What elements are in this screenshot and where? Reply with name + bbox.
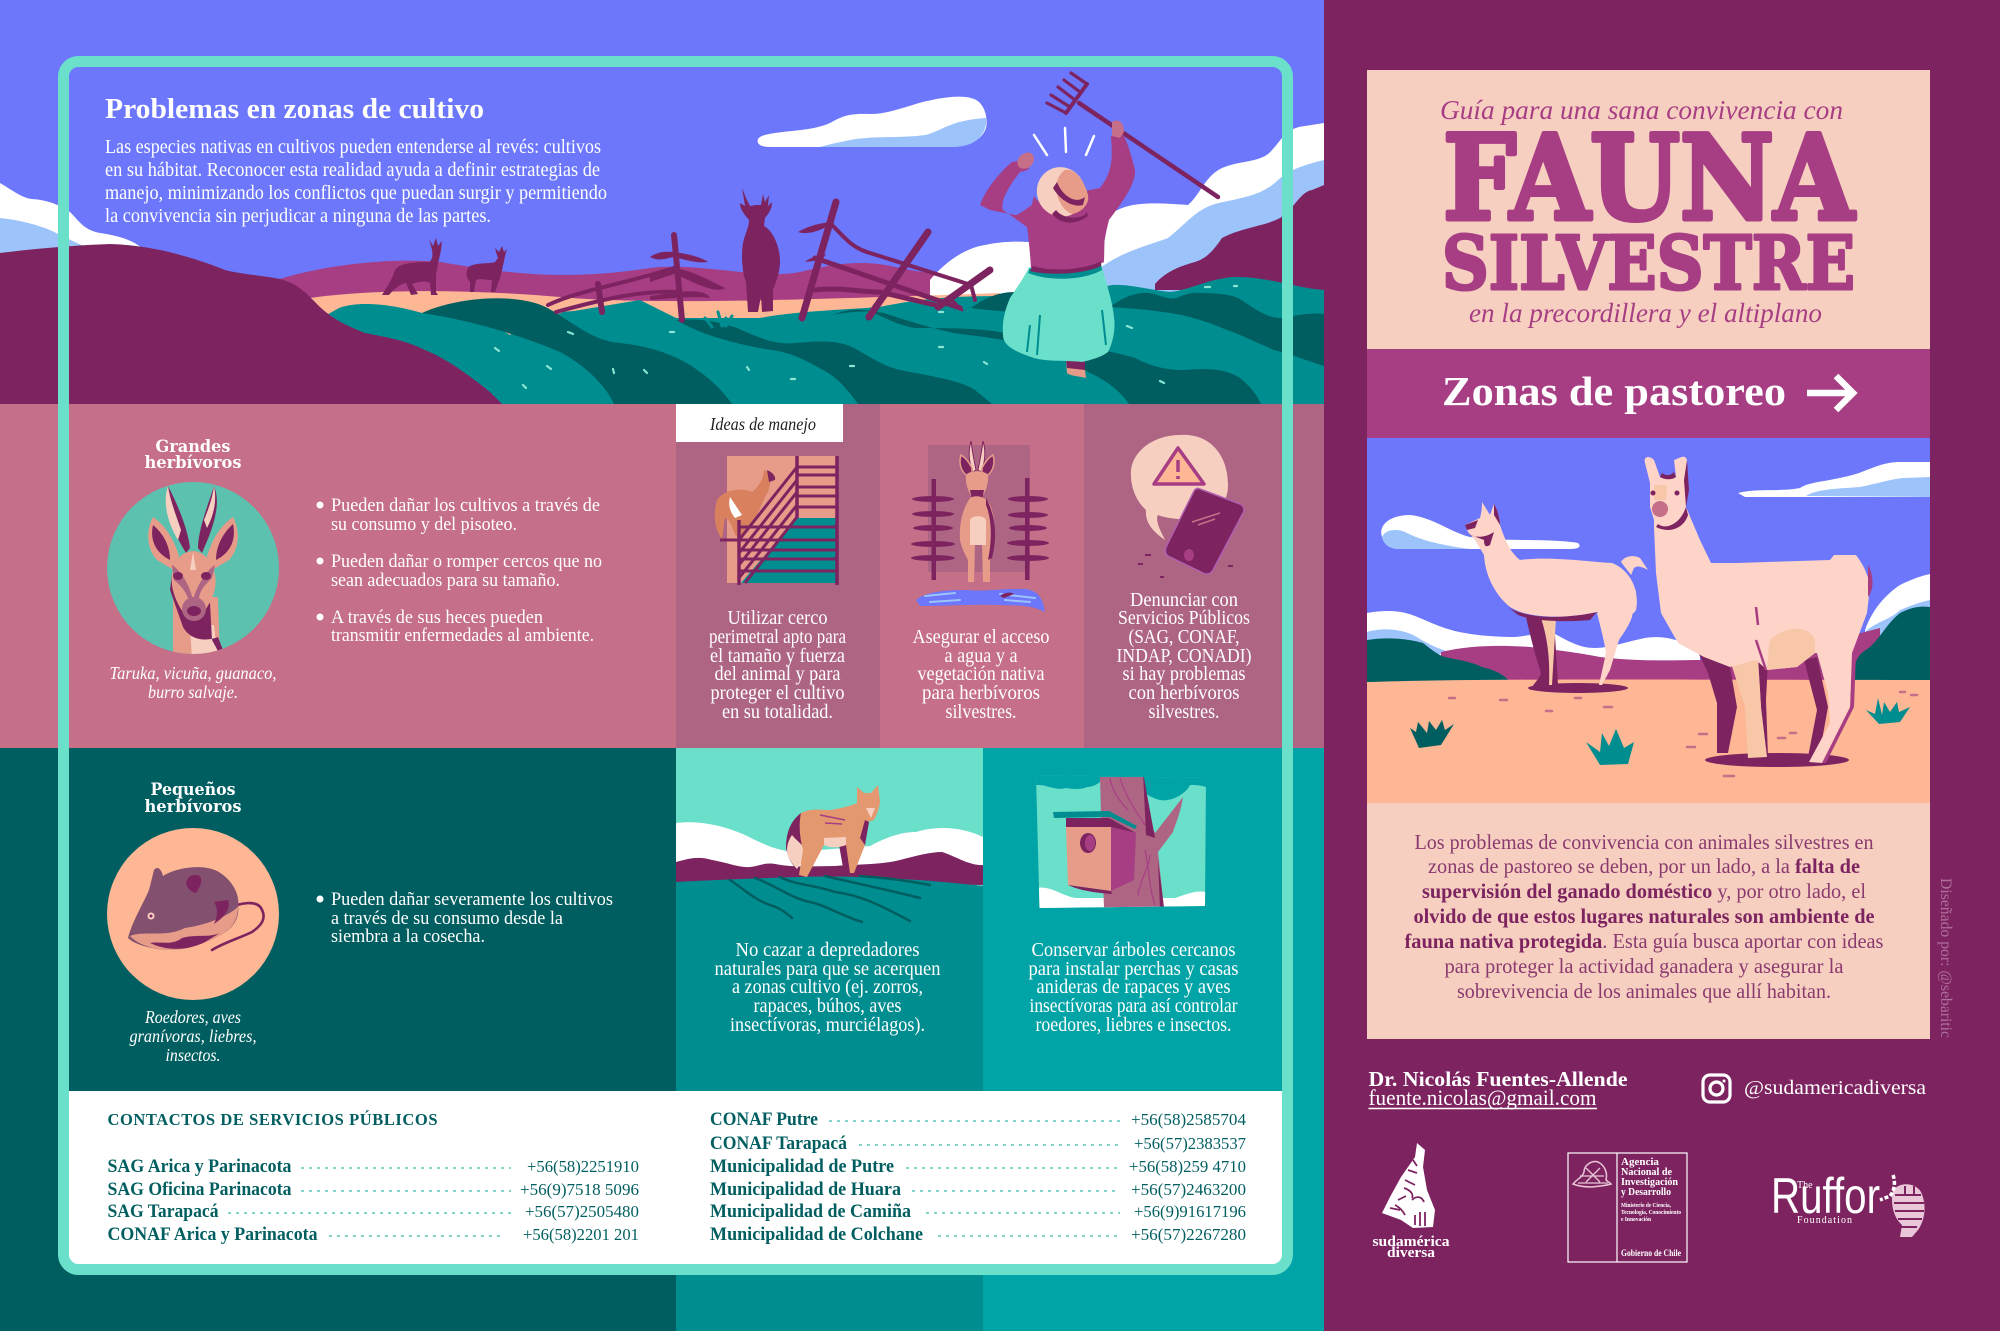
text block: intro: en su hábitat. Reconocer esta realidad ayuda a definir estrategias de [105, 159, 600, 181]
text: idea nest boxes [1028, 939, 1239, 1036]
caption: species: granívoras, liebres, [130, 1026, 256, 1046]
plants [1410, 698, 1910, 765]
heading: grandes herbívoros: herbívoros [144, 453, 242, 473]
logo: The Rufford Foundation: Foundation [1797, 1215, 1852, 1226]
row: large herbivores background [0, 404, 1324, 748]
list: contacts left: +56(9)7518 5096 [520, 1180, 639, 1199]
sand strip [310, 291, 1000, 335]
list: contacts right: CONAF Tarapacá [710, 1134, 847, 1154]
text: idea predators: No cazar a depredadores [736, 939, 920, 961]
text block: intro [105, 136, 607, 227]
deer silhouette: large [740, 188, 780, 312]
title: fauna: FAUNA [1443, 109, 1856, 247]
icon: fox landscape [676, 748, 983, 924]
text: idea report: Servicios Públicos [1118, 607, 1250, 629]
small plant [705, 312, 732, 327]
bullet list: problems large herbivores: Pueden dañar los cultivos a través de [331, 495, 600, 516]
handle: instagram: @sudamericadiversa [1744, 1077, 1926, 1099]
text: idea report: INDAP, CONADI) [1116, 645, 1252, 667]
panel: description: supervisión del ganado doméstico y, por otro lado, el [1422, 879, 1866, 903]
contact: author [1368, 1067, 1628, 1110]
text: idea report: Denunciar con [1130, 589, 1238, 611]
list: contacts right: CONAF Putre [710, 1110, 818, 1130]
text: idea fence: proteger el cultivo [710, 682, 844, 704]
label: ideas de manejo: Ideas de manejo [709, 414, 816, 434]
logo: ANID: e Innovación [1621, 1217, 1652, 1223]
list: contacts left: SAG Arica y Parinacota [108, 1157, 292, 1177]
list: contacts right: Municipalidad de Colchane [710, 1225, 923, 1245]
panel: description: para proteger la actividad ganadera y asegurar la [1444, 954, 1844, 978]
text: idea nest boxes: Conservar árboles cercanos [1032, 939, 1236, 961]
title: silvestre: SILVESTRE [1442, 221, 1855, 307]
panel: description: fauna nativa protegida. Esta guía busca aportar con ideas [1404, 929, 1884, 953]
blouse and arms [980, 130, 1135, 270]
arrow [1807, 376, 1853, 410]
bullet list: problems large herbivores: su consumo y del pisoteo. [331, 514, 517, 535]
icon: taruka with water and native plants [911, 441, 1049, 612]
list: contacts right: +56(57)2463200 [1131, 1180, 1246, 1199]
panel: idea fence [709, 456, 846, 723]
hill: left purple [0, 244, 502, 404]
list: contacts right: Municipalidad de Putre [710, 1157, 894, 1177]
heading: pequeños herbívoros: herbívoros [144, 797, 242, 817]
text: idea nest boxes: insectívoras para así controlar [1030, 995, 1238, 1017]
text: idea water: para herbívoros [922, 682, 1040, 704]
deer silhouette: left [382, 238, 442, 295]
logo: ANID [1568, 1153, 1687, 1262]
caption: species: Taruka, vicuña, guanaco, [110, 663, 276, 683]
icon: instagram [1703, 1075, 1730, 1102]
text: idea nest boxes: roedores, liebres e insectos. [1036, 1014, 1232, 1036]
panel: large herbivores [107, 437, 602, 702]
list: contacts right [710, 1110, 1246, 1245]
list: contacts left: +56(57)2505480 [525, 1202, 639, 1221]
text: idea fence: el tamaño y fuerza [710, 645, 845, 667]
credit: designer: Diseñado por: @sebaritic [1937, 878, 1954, 1038]
ground specks [1449, 692, 1917, 776]
logo: ANID: Ministerio de Ciencia, [1621, 1203, 1671, 1209]
heading: pequeños herbívoros [144, 780, 242, 817]
panel: small herbivores [107, 780, 613, 1065]
text: idea report [1116, 589, 1252, 723]
logo: The Rufford Foundation: The [1797, 1180, 1813, 1191]
fox [786, 785, 880, 877]
text: idea predators [714, 939, 940, 1036]
cloud: big right [930, 123, 1324, 310]
cloud: top centre [758, 97, 987, 147]
bullet list: problems large herbivores [316, 495, 602, 646]
cloud: left [0, 183, 140, 253]
text: idea predators: insectívoras, murciélagos). [730, 1014, 925, 1036]
list: contacts left [108, 1157, 639, 1245]
heading: grandes herbívoros [144, 437, 242, 473]
list: contacts left: +56(58)2251910 [527, 1157, 639, 1176]
label: ideas de manejo [676, 404, 843, 442]
subtitle bottom: en la precordillera y el altiplano [1469, 298, 1822, 328]
mountains: right purple [1155, 185, 1324, 290]
banner: zonas de pastoreo [1367, 349, 1930, 438]
panel: title block [1367, 70, 1930, 349]
text: idea nest boxes: anideras de rapaces y aves [1036, 976, 1231, 998]
icon: animal behind fence [715, 456, 837, 585]
logo: sudamérica diversa: diversa [1387, 1245, 1436, 1261]
mountains: far purple hills [280, 260, 934, 302]
text: idea fence: perimetral apto para [709, 626, 846, 648]
contact: author: Dr. Nicolás Fuentes-Allende [1368, 1067, 1628, 1091]
hands [1017, 120, 1124, 169]
fence leaves [650, 222, 835, 300]
text: idea report: silvestres. [1148, 701, 1220, 723]
text: idea water: silvestres. [946, 701, 1016, 723]
panel: top scene, crop problems [0, 0, 1324, 404]
llama: large [1645, 457, 1872, 767]
caption: species: Roedores, aves [144, 1007, 241, 1027]
text: idea predators: naturales para que se acerquen [714, 958, 940, 980]
logo: ANID: y Desarrollo [1621, 1186, 1671, 1198]
list: contacts right: +56(58)2585704 [1131, 1110, 1246, 1129]
text: idea report: (SAG, CONAF, [1128, 626, 1240, 648]
bullet list: problems large herbivores: A través de sus heces pueden [331, 607, 543, 628]
clouds [1367, 462, 1930, 670]
panel: idea report [1116, 435, 1252, 723]
text: idea fence [709, 607, 846, 723]
logo: The Rufford Foundation: Ruffor [1771, 1168, 1880, 1224]
panel: description: sobrevivencia de los animales que allí habitan. [1457, 979, 1831, 1003]
list: contacts right: +56(57)2267280 [1131, 1225, 1246, 1244]
bullet list: problems large herbivores: transmitir enfermedades al ambiente. [331, 625, 594, 646]
text: idea fence: Utilizar cerco [728, 607, 828, 629]
fields: green rows [300, 277, 1324, 404]
bullet list: problems small herbivores: siembra a la cosecha. [331, 926, 485, 947]
panel: idea water [911, 441, 1050, 723]
text: idea predators: rapaces, búhos, aves [754, 995, 902, 1017]
icon: taruka portrait [107, 482, 279, 660]
skirt [1003, 263, 1115, 362]
heading: contacts: CONTACTOS DE SERVICIOS PÚBLICOS [108, 1110, 438, 1129]
panel: description [1367, 803, 1930, 1039]
caption: species: burro salvaje. [148, 682, 238, 702]
heading: grandes herbívoros: Grandes [156, 437, 230, 457]
heading: pequeños herbívoros: Pequeños [150, 780, 236, 800]
list: contacts left: SAG Oficina Parinacota [108, 1180, 292, 1200]
frame: mint rounded border [64, 62, 1288, 1270]
heading: problems: Problemas en zonas de cultivo [105, 93, 484, 125]
logo: ANID: Tecnología, Conocimiento [1621, 1210, 1681, 1216]
list: contacts left: CONAF Arica y Parinacota [108, 1225, 318, 1245]
deer silhouette: middle [467, 246, 507, 292]
text: idea water: Asegurar el acceso [912, 626, 1050, 648]
logo: sudamérica diversa [1372, 1143, 1450, 1261]
panel: description: olvido de que estos lugares naturales son ambiente de [1414, 904, 1874, 928]
bullet list: problems small herbivores: a través de su consumo desde la [331, 908, 564, 929]
bullet list: problems large herbivores: sean adecuados para su tamaño. [331, 570, 560, 591]
list: contacts right: +56(58)259 4710 [1129, 1157, 1246, 1176]
broken fence [548, 202, 990, 320]
text: idea nest boxes: para instalar perchas y casas [1028, 958, 1239, 980]
panel: description: zonas de pastoreo se deben, por un lado, a la falta de [1428, 854, 1860, 878]
list: contacts right: +56(57)2383537 [1134, 1134, 1246, 1153]
text: idea predators: a zonas cultivo (ej. zorros, [732, 976, 923, 998]
woman with pitchfork [980, 73, 1218, 378]
subtitle top: Guía para una sana convivencia con [1440, 95, 1843, 125]
banner: zonas de pastoreo: Zonas de pastoreo [1442, 368, 1786, 414]
logo: ANID: Agencia [1621, 1156, 1659, 1168]
text: idea report: si hay problemas [1122, 663, 1246, 685]
text: idea water [912, 626, 1050, 723]
list: contacts right: Municipalidad de Huara [710, 1180, 901, 1200]
illustration: llamas [1367, 438, 1930, 803]
text: idea report: con herbívoros [1128, 682, 1240, 704]
bullet list: problems small herbivores: Pueden dañar severamente los cultivos [331, 889, 613, 910]
text: idea fence: del animal y para [714, 663, 841, 685]
surprise lines [1034, 128, 1094, 155]
text: idea water: a agua y a [944, 645, 1018, 667]
text block: intro: manejo, minimizando los conflictos que puedan surgir y permitiendo [105, 182, 607, 204]
caption: species [130, 1007, 256, 1065]
panel: description: Los problemas de convivencia con animales silvestres en [1414, 830, 1874, 854]
ground [1367, 680, 1930, 803]
logo: ANID: Nacional de [1621, 1166, 1672, 1178]
logo: ANID: Investigación [1621, 1176, 1678, 1188]
list: contacts left: +56(58)2201 201 [523, 1225, 639, 1244]
logo: sudamérica diversa: sudamérica [1372, 1234, 1450, 1250]
panel: public service contacts [64, 1091, 1287, 1270]
panel: right sidebar [1324, 0, 2000, 1331]
caption: species: insectos. [166, 1045, 220, 1065]
logo: ANID: Gobierno de Chile [1621, 1248, 1681, 1258]
hat [1036, 167, 1084, 216]
list: contacts left: SAG Tarapacá [108, 1202, 218, 1222]
icon: warning bubble and phone [1131, 435, 1244, 577]
pitchfork [1047, 73, 1218, 197]
grass ticks [495, 286, 1237, 388]
panel: idea predators [676, 748, 983, 1036]
list: contacts right: +56(9)91617196 [1134, 1202, 1246, 1221]
bullet list: problems large herbivores: Pueden dañar o romper cercos que no [331, 551, 602, 572]
contact: author: fuente.nicolas@gmail.com [1368, 1085, 1596, 1110]
caption: species [110, 663, 276, 702]
llama: small [1465, 502, 1648, 693]
leg [1066, 360, 1086, 378]
icon: rodent portrait [107, 828, 279, 1000]
icon: birdhouse on tree [1036, 772, 1206, 908]
text: idea fence: en su totalidad. [722, 701, 833, 723]
text block: intro: Las especies nativas en cultivos pueden entenderse al revés: cultivos [105, 136, 601, 158]
row: small herbivores background [0, 748, 1324, 1331]
text block: intro: la convivencia sin perjudicar a ninguna de las partes. [105, 205, 491, 227]
hills [1441, 628, 1880, 685]
panel: idea nest boxes [1028, 772, 1239, 1036]
bullet list: problems small herbivores [316, 889, 613, 947]
list: contacts right: Municipalidad de Camiña [710, 1202, 911, 1222]
text: idea water: vegetación nativa [918, 663, 1045, 685]
